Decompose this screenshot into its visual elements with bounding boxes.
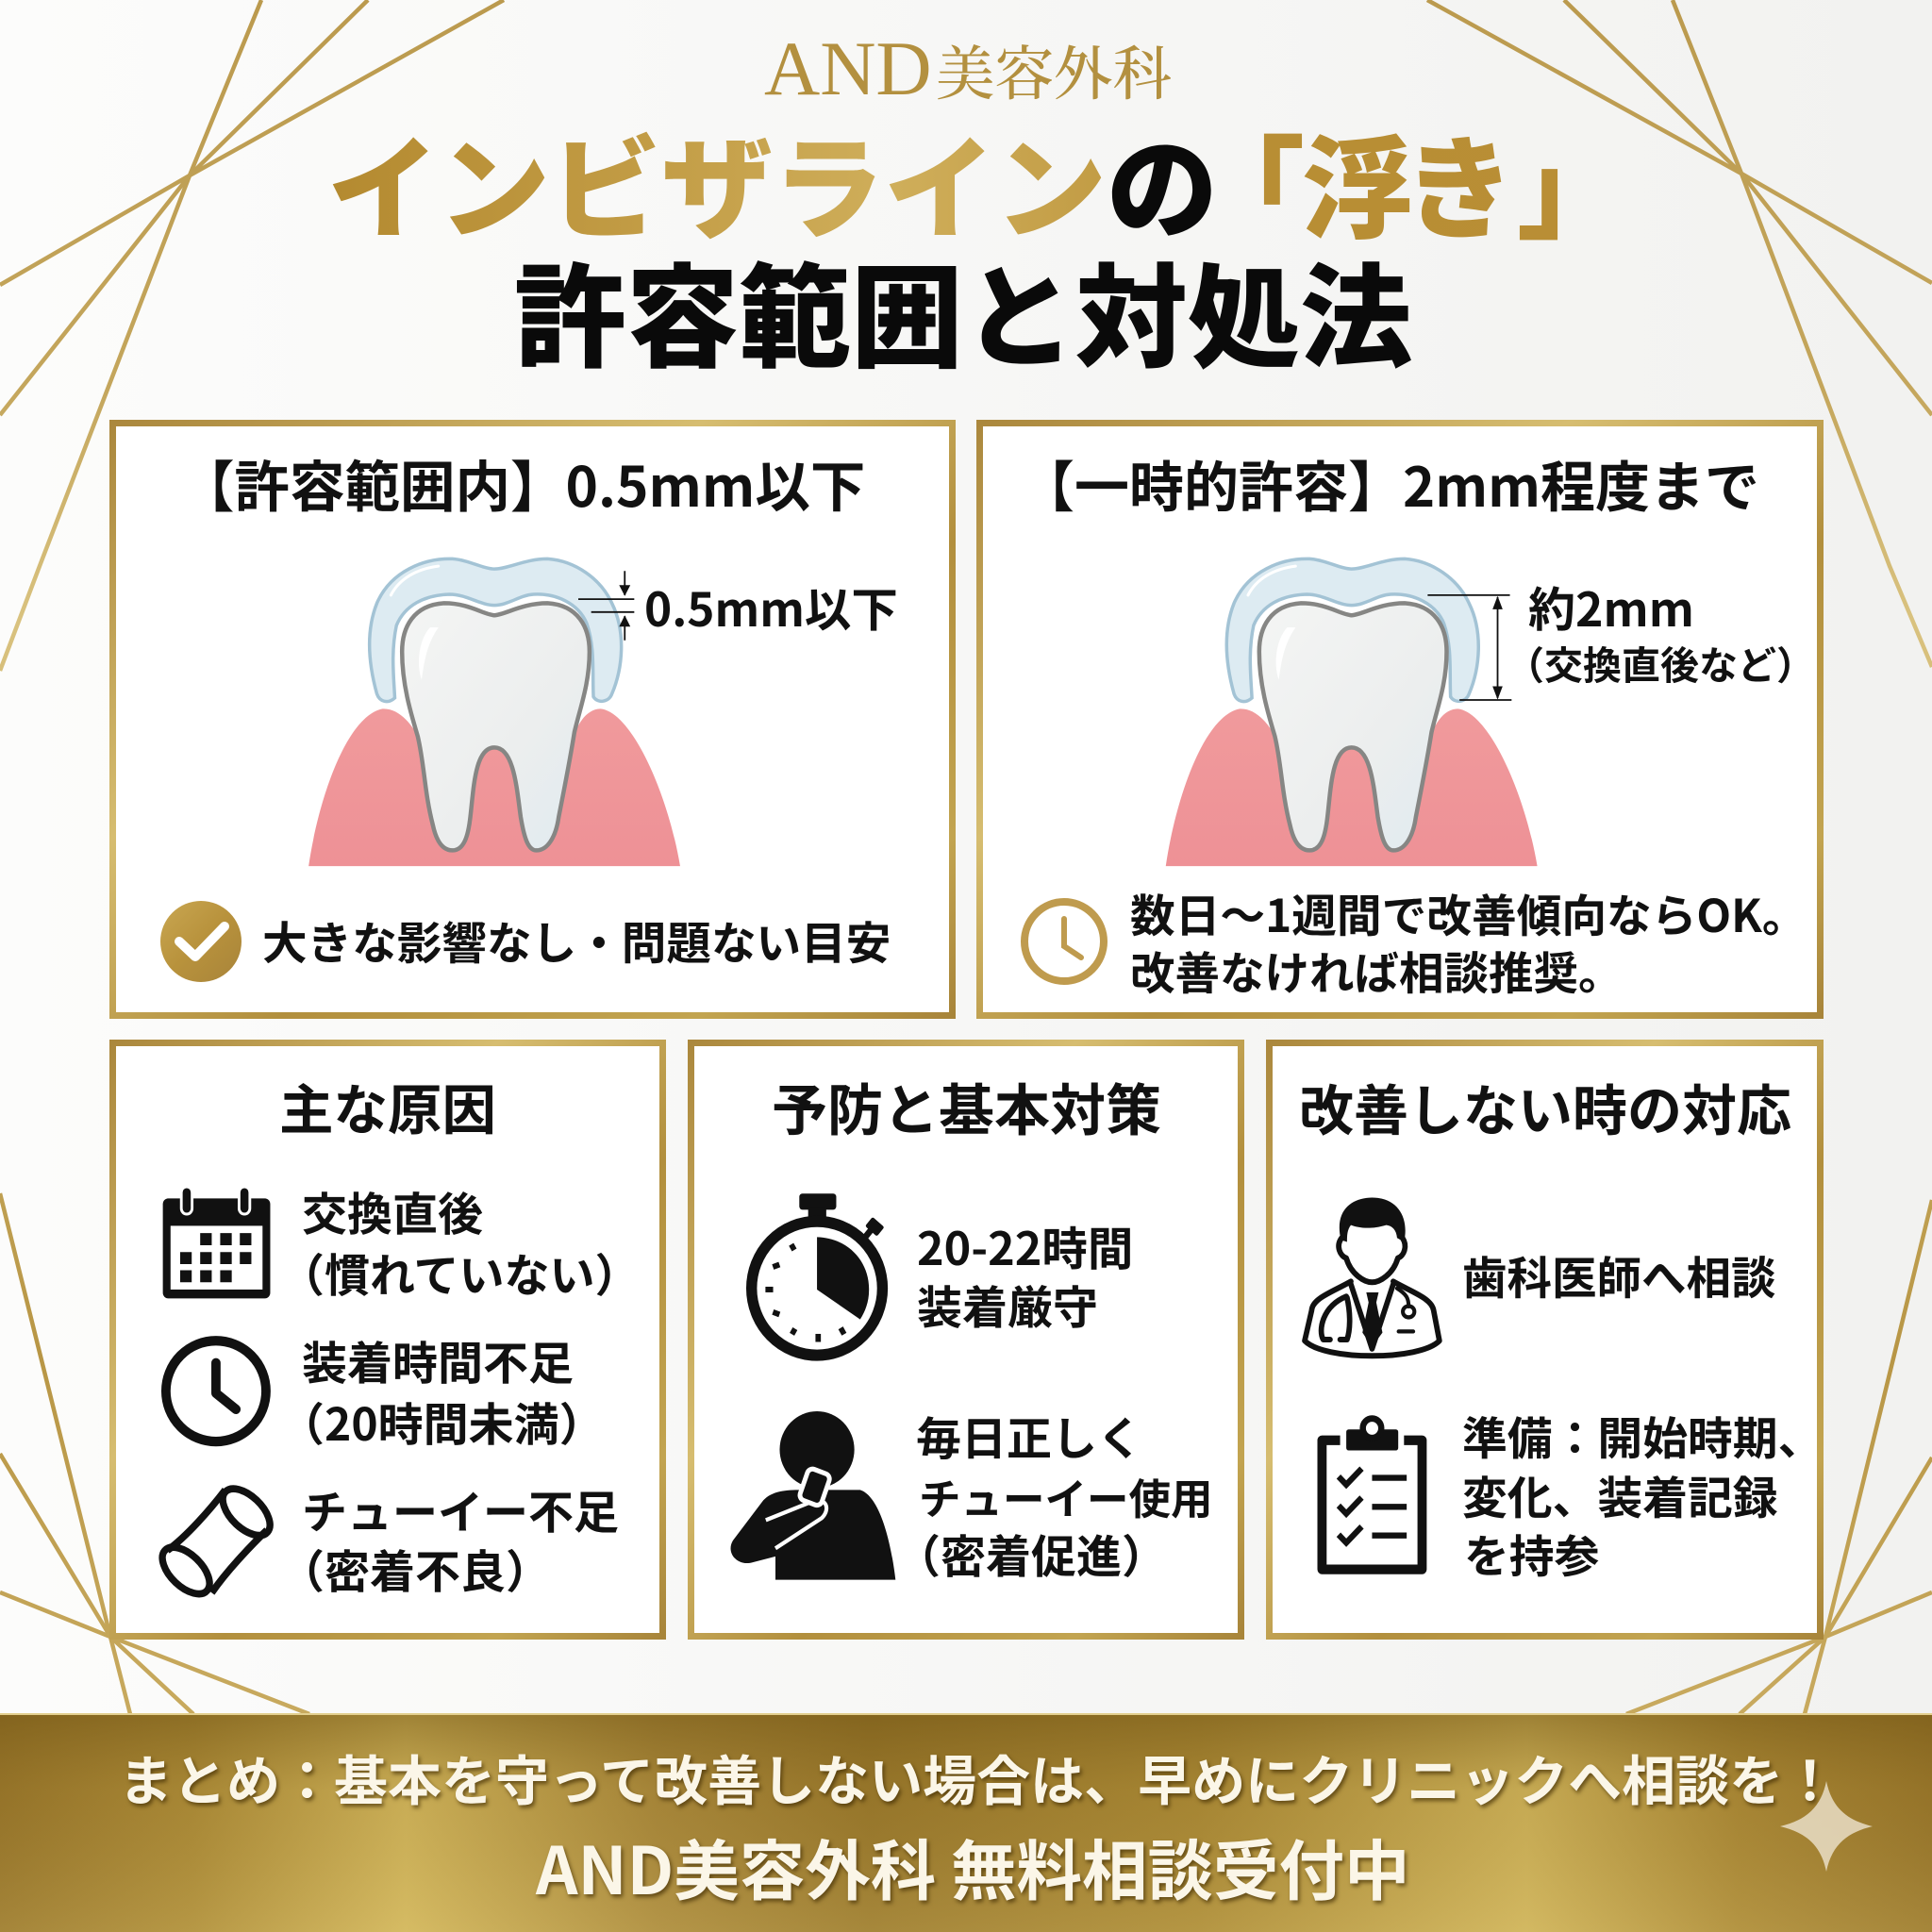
chewie use text: 毎日正しく: [916, 1402, 1142, 1468]
heading: within tolerance: 【許容範囲内】0.5mm以下: [179, 442, 865, 523]
panel: temporary tolerance: [979, 423, 1821, 1015]
icon: doctor: [1305, 1198, 1440, 1356]
clinic logo: 美容外科: [936, 26, 1172, 111]
note: temporary tolerance: 改善なければ相談推奨。: [1130, 938, 1623, 1003]
icon: sparkle: [1780, 1781, 1873, 1872]
note: within tolerance: 大きな影響なし・問題ない目安: [262, 908, 891, 973]
icon: person using chewie: [731, 1411, 895, 1580]
cause: just after change: （慣れていない）: [279, 1239, 641, 1305]
icon: calendar: [163, 1187, 270, 1298]
icon: stopwatch: [752, 1193, 884, 1356]
dimension marker 2mm: 約2mm: [1528, 573, 1694, 641]
preparation text: [1462, 1403, 1823, 1586]
clinic logo: AND: [764, 25, 932, 111]
heading: prevention: 予防と基本対策: [772, 1066, 1161, 1146]
free consultation text: AND美容外科 無料相談受付中: [535, 1819, 1410, 1914]
preparation text: 準備：開始時期、: [1462, 1403, 1823, 1468]
wear time text: [917, 1212, 1133, 1337]
title: [327, 100, 1628, 391]
tooth diagram 2mm: [1166, 558, 1538, 866]
panel: prevention: [691, 1043, 1241, 1636]
summary text: まとめ：基本を守って改善しない場合は、早めにクリニックへ相談を！: [119, 1739, 1837, 1816]
chewie use text: [895, 1402, 1213, 1586]
cause: wear time short: （20時間未満）: [279, 1388, 605, 1454]
icon: chewie: [155, 1480, 278, 1603]
heading: temporary tolerance: 【一時的許容】2mm程度まで: [1020, 443, 1759, 523]
clinic logo: [764, 25, 1172, 111]
cause: not enough chewie: [279, 1475, 619, 1601]
title: インビザラインの: [327, 100, 1218, 261]
dimension marker 0.5mm: 0.5mm以下: [644, 574, 898, 641]
title: 許容範囲と対処法: [514, 228, 1412, 391]
tooth diagram 0.5mm: [308, 558, 680, 866]
title: 「浮き」: [1193, 100, 1628, 261]
dimension marker 2mm: [1427, 573, 1815, 700]
panel: when not improving: [1270, 1043, 1823, 1636]
wear time text: 20-22時間: [917, 1212, 1133, 1278]
cause: just after change: [279, 1177, 641, 1305]
consult dentist text: 歯科医師へ相談: [1462, 1242, 1775, 1307]
icon: clipboard: [1322, 1419, 1422, 1570]
note: temporary tolerance: 数日～1週間で改善傾向ならOK。: [1130, 880, 1807, 945]
cause: not enough chewie: （密着不良）: [279, 1535, 551, 1601]
chewie use text: （密着促進）: [895, 1520, 1167, 1586]
note: temporary tolerance: [1130, 880, 1807, 1003]
panel: main causes: [113, 1043, 662, 1636]
cause: wear time short: 装着時間不足: [302, 1326, 574, 1392]
cause: not enough chewie: チューイー不足: [302, 1475, 619, 1541]
icon: gold check: [160, 901, 242, 982]
chewie use text: チューイー使用: [919, 1465, 1213, 1526]
dimension marker 2mm: （交換直後など）: [1506, 634, 1815, 691]
preparation text: を持参: [1464, 1521, 1599, 1586]
panel: within tolerance: [113, 423, 953, 1015]
bottom banner: [0, 1713, 1932, 1932]
preparation text: 変化、装着記録: [1462, 1462, 1778, 1527]
icon: gold clock: [1024, 902, 1104, 981]
cause: wear time short: [279, 1326, 605, 1454]
heading: main causes: 主な原因: [279, 1066, 496, 1145]
wear time text: 装着厳守: [917, 1271, 1098, 1337]
cause: just after change: 交換直後: [302, 1177, 483, 1243]
icon: clock: [166, 1341, 266, 1441]
heading: when not improving: 改善しない時の対応: [1299, 1067, 1791, 1146]
